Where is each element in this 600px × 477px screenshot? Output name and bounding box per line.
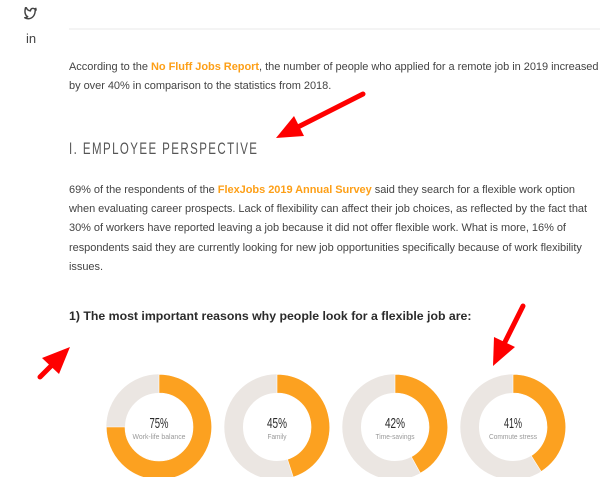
intro paragraph: According to the No Fluff Jobs Report, the number of people who applied for a remote job in 2019 increased [69, 61, 598, 73]
subheading: reasons: 1) The most important reasons why people look for a flexible job are: [69, 309, 471, 323]
heading: employee perspective: I. EMPLOYEE PERSPECTIVE [69, 139, 258, 158]
icon: linkedin: in [26, 31, 36, 46]
donut: time-savings 42%: 42% [385, 415, 405, 432]
intro paragraph [69, 61, 598, 92]
survey paragraph: respondents said they are currently looking for new job opportunities specifically because of work flexibility [69, 242, 582, 254]
donut: work-life balance 75% [106, 374, 212, 477]
donut: family 45%: Family [268, 432, 287, 441]
donut: family 45%: 45% [267, 415, 287, 432]
donut: time-savings 42% [352, 374, 448, 473]
survey paragraph: issues. [69, 261, 103, 273]
survey paragraph: 30% of workers have reported leaving a job because it did not offer flexible work. What is more, 16% of [69, 222, 566, 234]
survey paragraph: when evaluating career prospects. Lack of flexibility can affect their job choices, as reflected by the fact that [69, 203, 587, 215]
arrow: to heading [276, 94, 363, 138]
donut: commute stress 41% [470, 374, 566, 471]
donut: work-life balance 75%: 75% [150, 415, 168, 432]
donut: commute stress 41%: 41% [504, 415, 522, 432]
donut: commute stress 41%: Commute stress [489, 432, 537, 441]
donut: family 45% [234, 374, 330, 477]
arrow: to commute stress donut [493, 306, 523, 366]
survey paragraph: 69% of the respondents of the FlexJobs 2019 Annual Survey said they search for a flexible work option [69, 184, 575, 196]
survey paragraph [69, 184, 587, 273]
icon: twitter [24, 7, 37, 20]
donut: work-life balance 75%: Work-life balance [132, 432, 186, 441]
intro paragraph: by over 40% in comparison to the statistics from 2018. [69, 80, 331, 92]
arrow: left of charts [40, 347, 70, 377]
donut: time-savings 42%: Time-savings [376, 432, 415, 441]
